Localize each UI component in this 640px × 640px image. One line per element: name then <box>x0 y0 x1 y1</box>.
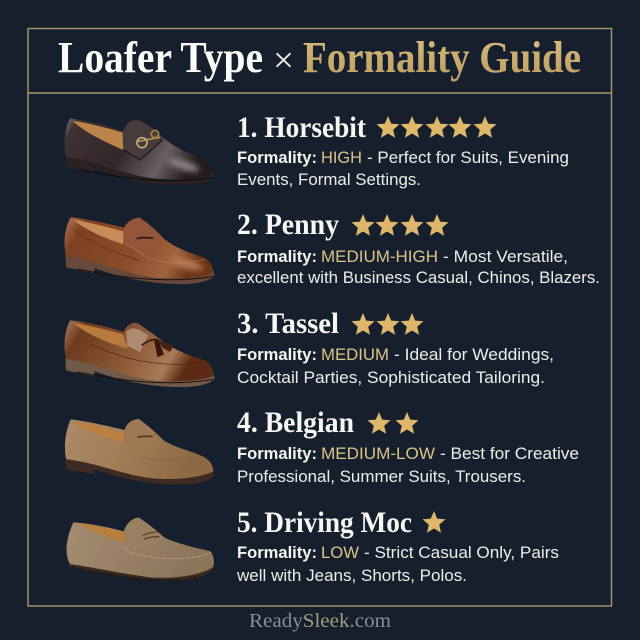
description: tassel: MEDIUM <box>321 345 389 364</box>
rating: one star <box>422 511 446 533</box>
description: penny: MEDIUM-HIGH <box>321 247 438 266</box>
description: driving moc: Formality: <box>237 543 317 562</box>
shoe: tassel <box>64 320 215 387</box>
heading: horsebit: 1. Horsebit <box>237 112 366 144</box>
entry 5: driving moc <box>236 507 559 585</box>
heading: penny: 2. Penny <box>237 209 339 241</box>
description: belgian <box>237 444 579 486</box>
description: belgian: Professional, Summer Suits, Trousers. <box>237 467 526 486</box>
description: driving moc: LOW <box>321 543 359 562</box>
heading: tassel: 3. Tassel <box>237 308 339 340</box>
entry 4: belgian <box>237 407 579 486</box>
title <box>58 33 581 82</box>
shoe: belgian <box>65 419 215 485</box>
title: Formality Guide <box>303 33 581 82</box>
rating: four stars <box>352 214 448 236</box>
description: driving moc <box>236 543 559 585</box>
shoe: driving moc <box>67 517 214 581</box>
shoe: penny <box>64 217 215 284</box>
description: belgian: MEDIUM-LOW <box>321 444 435 463</box>
entry 1: horsebit <box>237 112 569 189</box>
description: belgian: - Best for Creative <box>440 444 579 463</box>
description: tassel <box>237 345 554 387</box>
footer: site name: ReadySleek.com <box>249 610 391 632</box>
description: horsebit <box>237 148 569 189</box>
description: penny <box>237 247 600 287</box>
description: tassel: - Ideal for Weddings, <box>394 345 554 364</box>
rating: three stars <box>352 313 424 335</box>
description: driving moc: well with Jeans, Shorts, Polos. <box>236 566 467 585</box>
description: penny: - Most Versatile, <box>443 247 568 266</box>
heading: driving moc: 5. Driving Moc <box>237 507 412 539</box>
description: tassel: Cocktail Parties, Sophisticated Tailoring. <box>237 368 545 387</box>
description: horsebit: - Perfect for Suits, Evening <box>367 148 569 167</box>
description: penny: excellent with Business Casual, Chinos, Blazers. <box>237 268 600 287</box>
entry 2: penny <box>237 209 600 287</box>
entry 3: tassel <box>237 308 554 387</box>
description: horsebit: Formality: <box>237 148 317 167</box>
title: × <box>273 40 294 80</box>
description: horsebit: HIGH <box>321 148 362 167</box>
description: tassel: Formality: <box>237 345 317 364</box>
description: driving moc: - Strict Casual Only, Pairs <box>364 543 559 562</box>
rating: two stars <box>368 412 418 434</box>
heading: belgian: 4. Belgian <box>237 407 354 439</box>
description: penny: Formality: <box>237 247 317 266</box>
description: horsebit: Events, Formal Settings. <box>237 170 421 189</box>
description: belgian: Formality: <box>237 444 317 463</box>
shoe: horsebit <box>64 118 215 185</box>
rating: five stars <box>376 116 496 138</box>
title: Loafer Type <box>58 33 263 82</box>
